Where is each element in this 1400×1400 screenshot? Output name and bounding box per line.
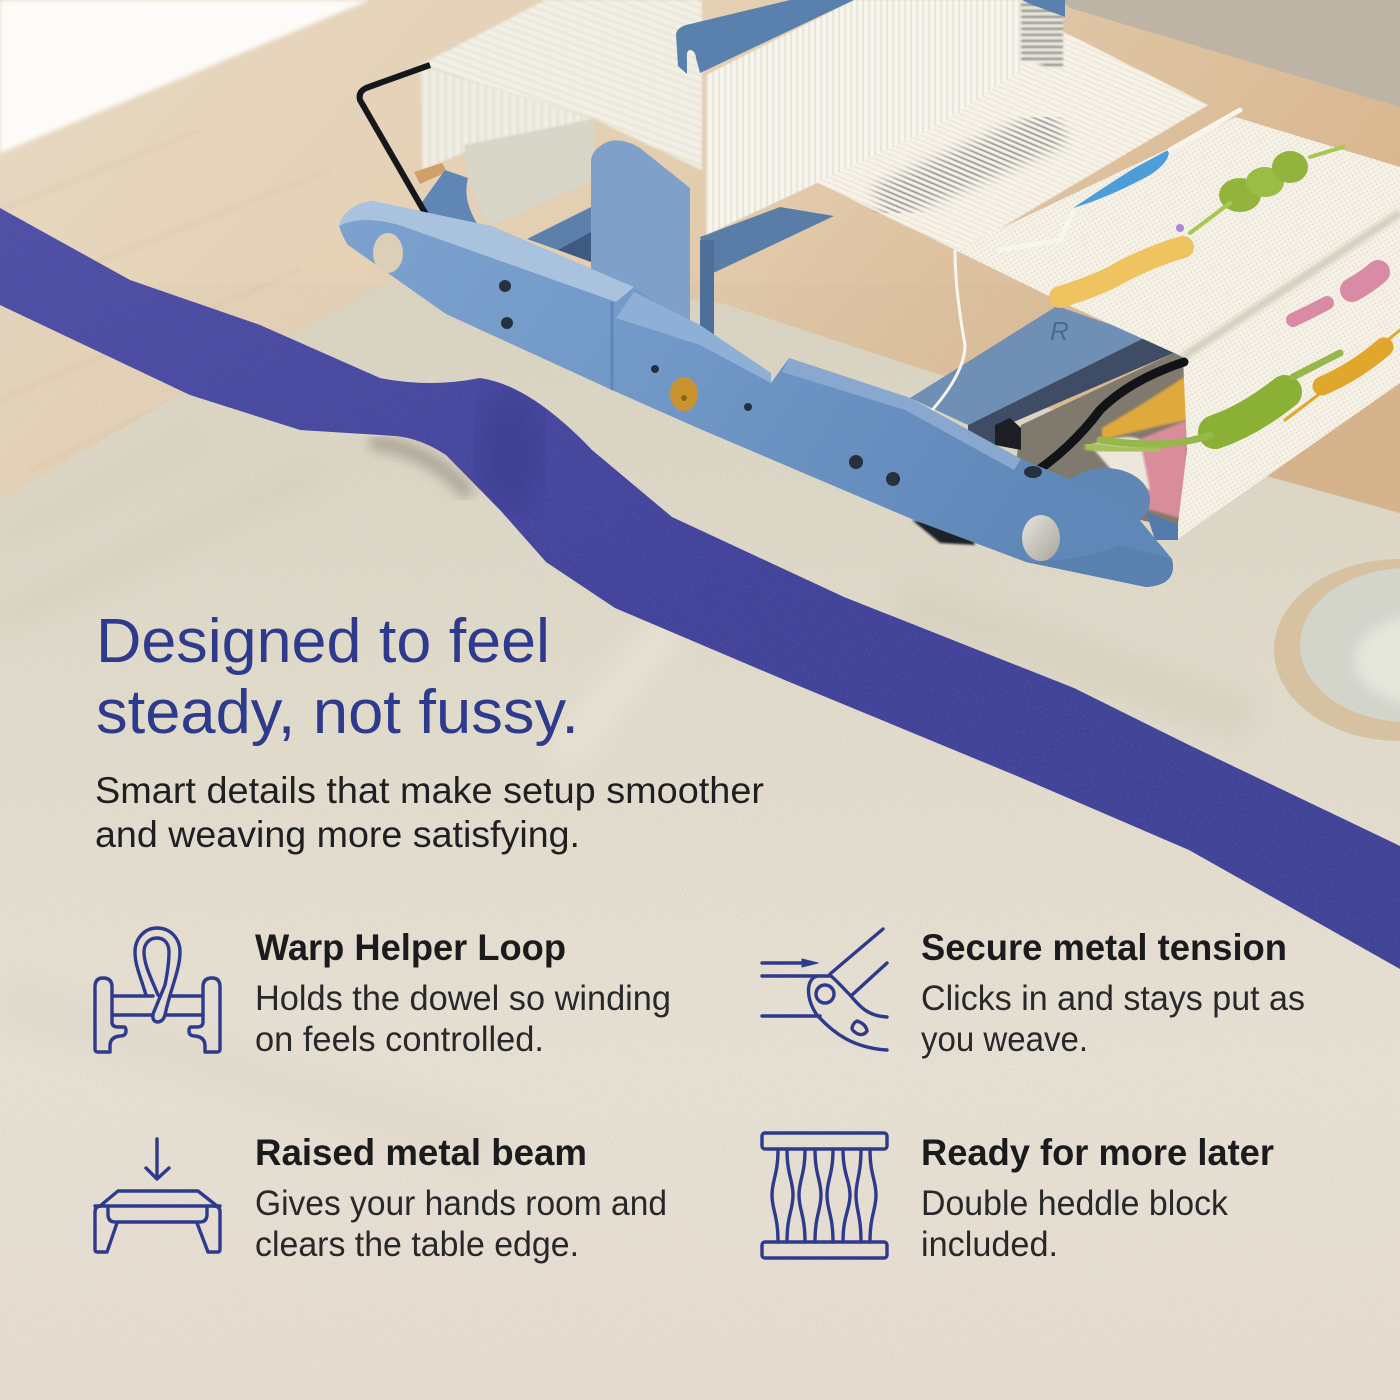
feature: raised metal beam bbox=[95, 1132, 667, 1264]
orange yarn bbox=[1322, 347, 1384, 386]
white wall at top left bbox=[0, 0, 370, 153]
vertical rear threads bbox=[420, 65, 594, 170]
body: ready for more later: Double heddle block bbox=[921, 1184, 1228, 1223]
body: secure metal tension bbox=[921, 979, 1305, 1059]
body: raised metal beam bbox=[255, 1184, 667, 1264]
linen texture overlay bbox=[0, 283, 1400, 1400]
rear warp sheet bbox=[420, 0, 702, 170]
screw holes bbox=[499, 280, 1042, 486]
table wood grain bbox=[0, 130, 330, 470]
feature: secure metal tension bbox=[762, 927, 1305, 1059]
feature: ready for more later bbox=[762, 1132, 1274, 1264]
icon: metal tension bbox=[762, 929, 887, 1050]
heading: secure metal tension: Secure metal tension bbox=[921, 927, 1287, 968]
faint loom logo: R bbox=[1050, 316, 1069, 346]
loom foot bbox=[912, 520, 975, 545]
loom bbox=[339, 0, 1400, 587]
right metal disc bbox=[1022, 515, 1060, 561]
rear heddle threads bbox=[1021, 0, 1063, 70]
end roller bbox=[1060, 468, 1178, 540]
back frame beams bbox=[527, 207, 834, 336]
black block bbox=[995, 418, 1021, 450]
body: warp helper loop bbox=[255, 979, 671, 1059]
ceramic bowl bbox=[1274, 559, 1400, 741]
icon: warp helper loop bbox=[95, 928, 220, 1052]
loose white warp thread bbox=[925, 250, 965, 418]
heddle blue rear end bbox=[1022, 0, 1065, 17]
upright post bbox=[591, 140, 690, 330]
woven cloth front face bbox=[1176, 213, 1400, 540]
black tension wire bbox=[1028, 362, 1184, 477]
roller bracket bbox=[420, 170, 478, 225]
cream warp roller bbox=[464, 119, 594, 226]
front bar highlights bbox=[339, 201, 1173, 587]
table top background bbox=[0, 0, 1400, 620]
green yarn beads bbox=[1219, 151, 1308, 212]
cloth fold shading bbox=[1183, 213, 1400, 357]
dark lower beam bbox=[968, 337, 1176, 450]
grey wall at top right bbox=[1060, 0, 1400, 107]
warp thread fan bbox=[710, 10, 1208, 252]
purple ribbon bbox=[0, 208, 1400, 969]
front bar side bbox=[339, 201, 1173, 587]
body: secure metal tension: Clicks in and stays put as bbox=[921, 979, 1305, 1018]
warp thread fan base bbox=[710, 10, 1208, 252]
heading: ready for more later: Ready for more later bbox=[921, 1132, 1274, 1173]
linen table runner bbox=[0, 283, 1400, 1400]
woven cloth top face bbox=[955, 117, 1400, 357]
body: warp helper loop: on feels controlled. bbox=[255, 1020, 544, 1059]
cross beam bbox=[910, 306, 1146, 425]
heddle threads bbox=[706, 0, 1021, 235]
blue yarn bbox=[1073, 150, 1169, 208]
left metal disc bbox=[373, 233, 403, 273]
heading: warp helper loop: Warp Helper Loop bbox=[255, 927, 566, 968]
body: secure metal tension: you weave. bbox=[921, 1020, 1088, 1059]
wooden dowel peg bbox=[414, 163, 447, 184]
dark gaps behind warp bbox=[880, 125, 1060, 205]
title: Designed to feel bbox=[96, 607, 550, 676]
heddle top bar bbox=[676, 0, 854, 74]
green front yarn bbox=[1215, 392, 1285, 432]
interior shadow bbox=[1015, 350, 1190, 530]
subtitle: Smart details that make setup smoother bbox=[95, 770, 764, 811]
title bbox=[96, 607, 579, 747]
body: raised metal beam: Gives your hands room and bbox=[255, 1184, 667, 1223]
yarn embellishments bbox=[1000, 110, 1400, 444]
icon: double heddle block bbox=[762, 1133, 887, 1258]
ribbon hump shadow bbox=[370, 442, 470, 495]
title: steady, not fussy. bbox=[96, 678, 579, 747]
subtitle: and weaving more satisfying. bbox=[95, 814, 580, 855]
brass knob bbox=[670, 377, 698, 411]
icon: raised beam with arrow bbox=[95, 1139, 220, 1252]
linen fold shading bbox=[0, 440, 1250, 1150]
black warp helper wire bbox=[360, 65, 430, 218]
feature: warp helper loop bbox=[95, 927, 671, 1059]
body: raised metal beam: clears the table edge. bbox=[255, 1225, 579, 1264]
yellow yarn bbox=[1060, 247, 1183, 297]
interior yarn bbox=[1085, 375, 1187, 520]
body: ready for more later: included. bbox=[921, 1225, 1058, 1264]
heading: raised metal beam: Raised metal beam bbox=[255, 1132, 587, 1173]
subtitle bbox=[95, 770, 764, 855]
white yarn tail bbox=[1000, 110, 1240, 250]
body: ready for more later bbox=[921, 1184, 1228, 1264]
pink yarn bbox=[1293, 303, 1327, 320]
body: warp helper loop: Holds the dowel so winding bbox=[255, 979, 671, 1018]
